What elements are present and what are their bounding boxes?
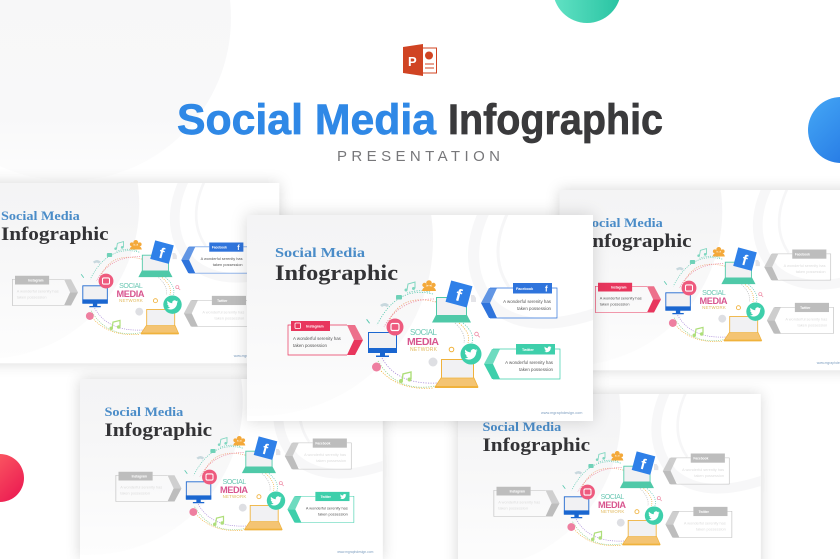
- card: Twitter: A wonderful serenity has: [306, 506, 348, 510]
- card: Facebook: taken possession: [796, 270, 826, 274]
- heading: Infographic: [275, 260, 398, 285]
- card: Facebook: taken possession: [517, 306, 552, 311]
- card: Facebook: A wonderful serenity has: [304, 453, 346, 457]
- card: Facebook: taken possession: [316, 459, 346, 463]
- card: Facebook: f: [545, 284, 548, 294]
- panel: slide bottom right: [313, 262, 764, 559]
- card: Twitter: Twitter: [522, 348, 534, 352]
- heading: [584, 216, 692, 252]
- network diagram: [562, 451, 663, 546]
- card: Facebook: A wonderful serenity has: [682, 468, 724, 472]
- card: Instagram: Instagram: [611, 285, 627, 289]
- card: Instagram: [288, 321, 363, 355]
- card: Twitter: [767, 303, 833, 334]
- heading: Infographic: [1, 224, 109, 245]
- card: Instagram: [595, 283, 661, 312]
- card: Facebook: Facebook: [516, 287, 534, 291]
- heading: [482, 420, 591, 456]
- network diagram: MEDIA: [598, 500, 626, 510]
- card: Facebook: Facebook: [315, 442, 331, 446]
- card: Instagram: Instagram: [28, 278, 44, 282]
- card: Instagram: [494, 487, 560, 516]
- card: Instagram: A wonderful serenity has: [120, 485, 162, 489]
- network diagram: SOCIAL: [223, 479, 246, 486]
- card: Facebook: Facebook: [795, 253, 810, 257]
- network diagram: MEDIA: [407, 336, 439, 348]
- panel: slide bottom left: [0, 247, 386, 559]
- network diagram: [366, 280, 482, 388]
- card: Instagram: [12, 276, 78, 306]
- card: Instagram: A wonderful serenity has: [600, 296, 642, 300]
- heading: Social Media: [105, 405, 183, 419]
- card: Facebook: taken possession: [694, 474, 724, 478]
- page background shape: [0, 0, 231, 181]
- network diagram: NETWORK: [702, 305, 726, 310]
- decorative teal circle: [553, 0, 621, 23]
- card: Facebook: [285, 438, 351, 469]
- heading: Social Media: [584, 216, 663, 230]
- heading: [1, 209, 109, 245]
- card: Twitter: [287, 492, 354, 522]
- network diagram: NETWORK: [223, 494, 246, 499]
- card: Instagram: taken possession: [17, 296, 46, 300]
- icon: PowerPoint logo: P: [408, 54, 417, 69]
- heading: Social Media: [1, 209, 80, 223]
- network diagram: NETWORK: [601, 509, 624, 514]
- card: Facebook: A wonderful serenity has: [784, 264, 826, 268]
- card: Twitter: A wonderful serenity has: [684, 521, 726, 525]
- card: Facebook: A wonderful serenity has: [503, 299, 552, 304]
- network diagram: SOCIAL: [702, 290, 726, 297]
- network diagram: NETWORK: [410, 347, 438, 353]
- heading: Infographic: [483, 435, 591, 456]
- decorative blue circle: [808, 97, 840, 163]
- heading: Social Media: [483, 420, 561, 434]
- card: Facebook: [764, 250, 831, 280]
- card: Instagram: taken possession: [293, 343, 327, 348]
- card: Instagram: taken possession: [120, 492, 150, 496]
- card: Facebook: A wonderful serenity has: [201, 257, 243, 261]
- card: Instagram: A wonderful serenity has: [498, 500, 540, 504]
- card: Twitter: taken possession: [696, 528, 726, 532]
- card: Instagram: Instagram: [306, 324, 324, 328]
- heading: [275, 246, 398, 285]
- network diagram: NETWORK: [119, 298, 143, 303]
- card: Facebook: Facebook: [693, 457, 709, 461]
- network diagram: SOCIAL: [410, 328, 438, 337]
- decorative red circle: [0, 454, 24, 502]
- card: Twitter: A wonderful serenity has: [505, 360, 554, 365]
- card: Twitter: taken possession: [318, 513, 348, 517]
- panel: main slide: [81, 64, 597, 421]
- card: Twitter: Twitter: [699, 510, 710, 514]
- card: Twitter: Twitter: [321, 495, 332, 499]
- card: Instagram: Instagram: [510, 489, 525, 493]
- card: Twitter: taken possession: [519, 367, 554, 372]
- network diagram: MEDIA: [116, 289, 145, 299]
- card: Facebook: [663, 454, 729, 484]
- card: Instagram: A wonderful serenity has: [17, 289, 59, 293]
- card: Instagram: Instagram: [132, 474, 147, 478]
- footer url: www.mgraphdesign.com: [337, 550, 374, 554]
- footer url: www.mgraphdesign.com: [541, 411, 582, 415]
- footer url: www.mgraphdesign.com: [234, 354, 270, 358]
- network diagram: MEDIA: [700, 296, 728, 306]
- card: Twitter: taken possession: [215, 317, 244, 321]
- card: Instagram: taken possession: [600, 303, 629, 307]
- card: Instagram: taken possession: [498, 507, 528, 511]
- card: Facebook: [181, 242, 248, 273]
- network diagram: SOCIAL: [119, 283, 143, 290]
- card: Twitter: A wonderful serenity has: [785, 317, 827, 321]
- card: Twitter: [184, 296, 250, 326]
- card: Twitter: Twitter: [217, 299, 228, 303]
- card: Instagram: [116, 472, 182, 502]
- heading: [104, 405, 213, 441]
- title: Social Media: [177, 96, 437, 144]
- heading: Infographic: [105, 420, 213, 441]
- card: Facebook: Facebook: [212, 246, 227, 250]
- network diagram: [664, 247, 765, 342]
- icon: PowerPoint logo: [403, 44, 436, 76]
- card: Facebook: taken possession: [213, 263, 243, 267]
- card: Twitter: taken possession: [798, 324, 827, 328]
- heading: Social Media: [275, 246, 365, 261]
- network diagram: [81, 240, 182, 335]
- panel: slide top left: [0, 51, 283, 363]
- network diagram: [184, 436, 285, 531]
- card: Facebook: [481, 283, 557, 318]
- card: Instagram: A wonderful serenity has: [293, 336, 342, 341]
- network diagram: MEDIA: [220, 485, 248, 495]
- heading: Infographic: [584, 231, 692, 252]
- card: Twitter: [484, 344, 560, 379]
- card: Twitter: [665, 507, 732, 538]
- card: Twitter: Twitter: [800, 306, 811, 310]
- card: Facebook: f: [237, 245, 240, 252]
- card: Twitter: A wonderful serenity has: [202, 310, 244, 314]
- panel: slide top right: [414, 58, 840, 370]
- title: Infographic: [448, 96, 663, 144]
- subtitle: PRESENTATION: [337, 148, 500, 165]
- network diagram: SOCIAL: [601, 494, 624, 501]
